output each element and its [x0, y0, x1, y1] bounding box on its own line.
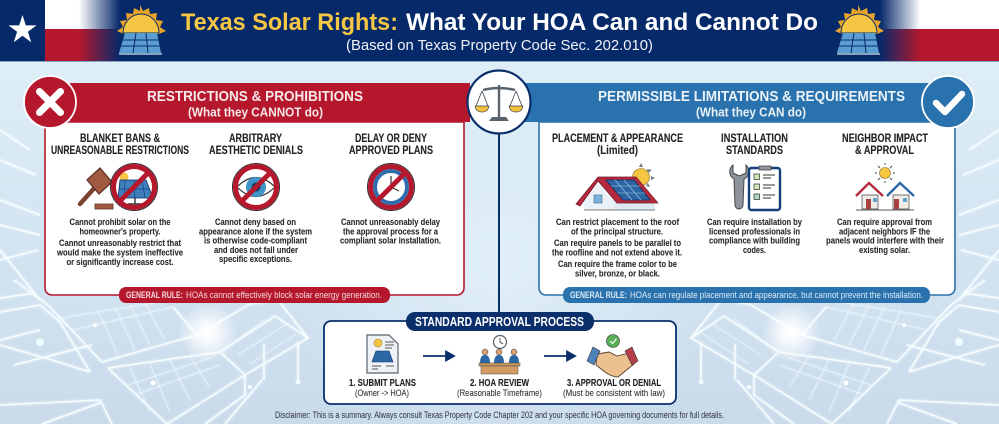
column: neighbor impact: NEIGHBOR IMPACT [842, 133, 928, 145]
panel: permissible [525, 76, 974, 303]
icon: banned clock [368, 164, 414, 210]
column: delay or deny: the approval process for a [343, 226, 439, 238]
column: delay or deny: Cannot unreasonably delay [341, 217, 441, 228]
column: installation: Can require installation by [707, 217, 803, 228]
column: placement: (Limited) [597, 145, 638, 157]
blue header band: (What they CAN do) [696, 104, 806, 120]
column: placement [552, 133, 683, 280]
right Texas flag [880, 0, 999, 61]
left Texas flag [0, 0, 120, 61]
column: placement: the roofline and not extend above it. [552, 248, 682, 258]
column: aesthetic denials: is otherwise code-compliant [204, 236, 308, 246]
column: installation: compliance with building [709, 236, 800, 246]
step 3: approval or denial: 3. APPROVAL OR DENIAL [567, 377, 661, 389]
step 2: HOA review: 2. HOA REVIEW [470, 377, 529, 389]
icon: wrench and clipboard [730, 165, 780, 210]
column: neighbor impact [826, 133, 944, 256]
column: placement: PLACEMENT & APPEARANCE [552, 133, 683, 145]
red header band [70, 83, 470, 122]
column: blanket bans: Cannot unreasonably restrict that [59, 238, 182, 249]
column: placement: silver, bronze, or black. [575, 268, 660, 280]
icon: house with rooftop solar [576, 163, 658, 210]
column: installation: STANDARDS [726, 145, 783, 157]
icon: X badge [24, 76, 76, 128]
step 1: submit plans [349, 335, 416, 399]
process box [324, 321, 676, 404]
arrow: step 2 to 3 [544, 352, 575, 360]
icon: document with solar plan [367, 335, 398, 373]
panel: standard approval process [324, 312, 676, 404]
icon: review panel with clock [479, 336, 520, 374]
column: aesthetic denials: ARBITRARY [229, 133, 282, 145]
column: blanket bans: BLANKET BANS & [80, 133, 160, 145]
column: placement: Can restrict placement to the roof [556, 217, 680, 228]
column: installation: INSTALLATION [721, 133, 788, 145]
column: neighbor impact: panels would interfere with their [826, 236, 944, 246]
step 3: approval or denial: (Must be consistent with law) [563, 388, 665, 399]
panel body [45, 122, 464, 295]
column: aesthetic denials: Cannot deny based on [215, 217, 296, 228]
column: blanket bans: UNREASONABLE RESTRICTIONS [51, 145, 189, 157]
title: Texas Solar Rights: [181, 9, 398, 36]
column: neighbor impact: adjacent neighbors IF the [839, 226, 930, 238]
column: aesthetic denials: appearance alone if the system [199, 226, 312, 238]
column: aesthetic denials [199, 133, 312, 265]
column: blanket bans: Cannot prohibit solar on the [70, 217, 170, 228]
red header band: RESTRICTIONS & PROHIBITIONS [147, 89, 363, 105]
panel body [539, 122, 955, 295]
column: blanket bans: or significantly increase cost. [66, 257, 174, 268]
general rule pill: restrictions: HOAs cannot effectively block solar energy generation. [186, 290, 382, 301]
blue header band: PERMISSIBLE LIMITATIONS & REQUIREMENTS [598, 89, 905, 105]
icon: gavel and banned solar panel [80, 164, 158, 210]
icon: sun and solar panel left [117, 5, 166, 54]
icon: neighboring houses with sun [856, 163, 914, 210]
icon: scales of justice [468, 70, 530, 134]
column: delay or deny [340, 133, 441, 246]
general rule pill: restrictions [119, 287, 390, 303]
general rule pill: permissible: HOAs can regulate placement and appearance, but cannot prevent the installation. [630, 290, 923, 301]
column: placement: of the principal structure. [571, 226, 663, 238]
process heading [406, 312, 594, 331]
icon: banned eye [232, 164, 280, 210]
red header band: (What they CANNOT do) [188, 104, 323, 120]
column: installation [707, 133, 803, 256]
column: neighbor impact: existing solar. [859, 245, 910, 256]
column: delay or deny: DELAY OR DENY [355, 133, 427, 145]
column: neighbor impact: Can require approval from [837, 217, 932, 228]
column: blanket bans: would make the system ineffective [56, 248, 183, 258]
general rule pill: permissible [563, 287, 930, 303]
column: blanket bans: homeowner's property. [80, 226, 160, 238]
subtitle: (Based on Texas Property Code Sec. 202.010) [346, 37, 653, 54]
icon: sun and solar panel right [835, 5, 884, 54]
column: aesthetic denials: AESTHETIC DENIALS [209, 145, 303, 157]
step 2: HOA review [457, 336, 542, 399]
step 3: approval or denial [563, 334, 665, 399]
arrow: step 1 to 2 [423, 352, 454, 360]
step 1: submit plans: (Owner -> HOA) [355, 388, 409, 399]
center divider line [498, 130, 500, 321]
column: delay or deny: compliant solar installation. [340, 236, 441, 246]
blue header band [525, 83, 935, 122]
column: neighbor impact: & APPROVAL [855, 145, 914, 157]
column: blanket bans [51, 133, 189, 268]
header banner [0, 0, 999, 62]
column: installation: codes. [743, 245, 766, 256]
column: installation: licensed professionals in [709, 226, 800, 238]
process heading: STANDARD APPROVAL PROCESS [415, 314, 584, 329]
icon: check badge [922, 76, 974, 128]
column: delay or deny: APPROVED PLANS [349, 145, 433, 157]
icon: handshake with check [587, 334, 638, 377]
column: placement: Can require the frame color to be [558, 259, 677, 270]
column: aesthetic denials: and does not fall under [214, 245, 298, 256]
disclaimer: Disclaimer: This is a summary. Always consult Texas Property Code Chapter 202 and your specific HOA governing documents for full details. [275, 410, 724, 420]
step 2: HOA review: (Reasonable Timeframe) [457, 388, 542, 399]
title: What Your HOA Can and Cannot Do [406, 9, 818, 36]
panel: restrictions [24, 76, 470, 303]
column: aesthetic denials: specific exceptions. [219, 254, 292, 265]
column: placement: Can require panels to be parallel to [554, 238, 681, 249]
step 1: submit plans: 1. SUBMIT PLANS [349, 377, 416, 389]
general rule pill: permissible: GENERAL RULE: [570, 290, 627, 301]
general rule pill: restrictions: GENERAL RULE: [126, 290, 183, 301]
